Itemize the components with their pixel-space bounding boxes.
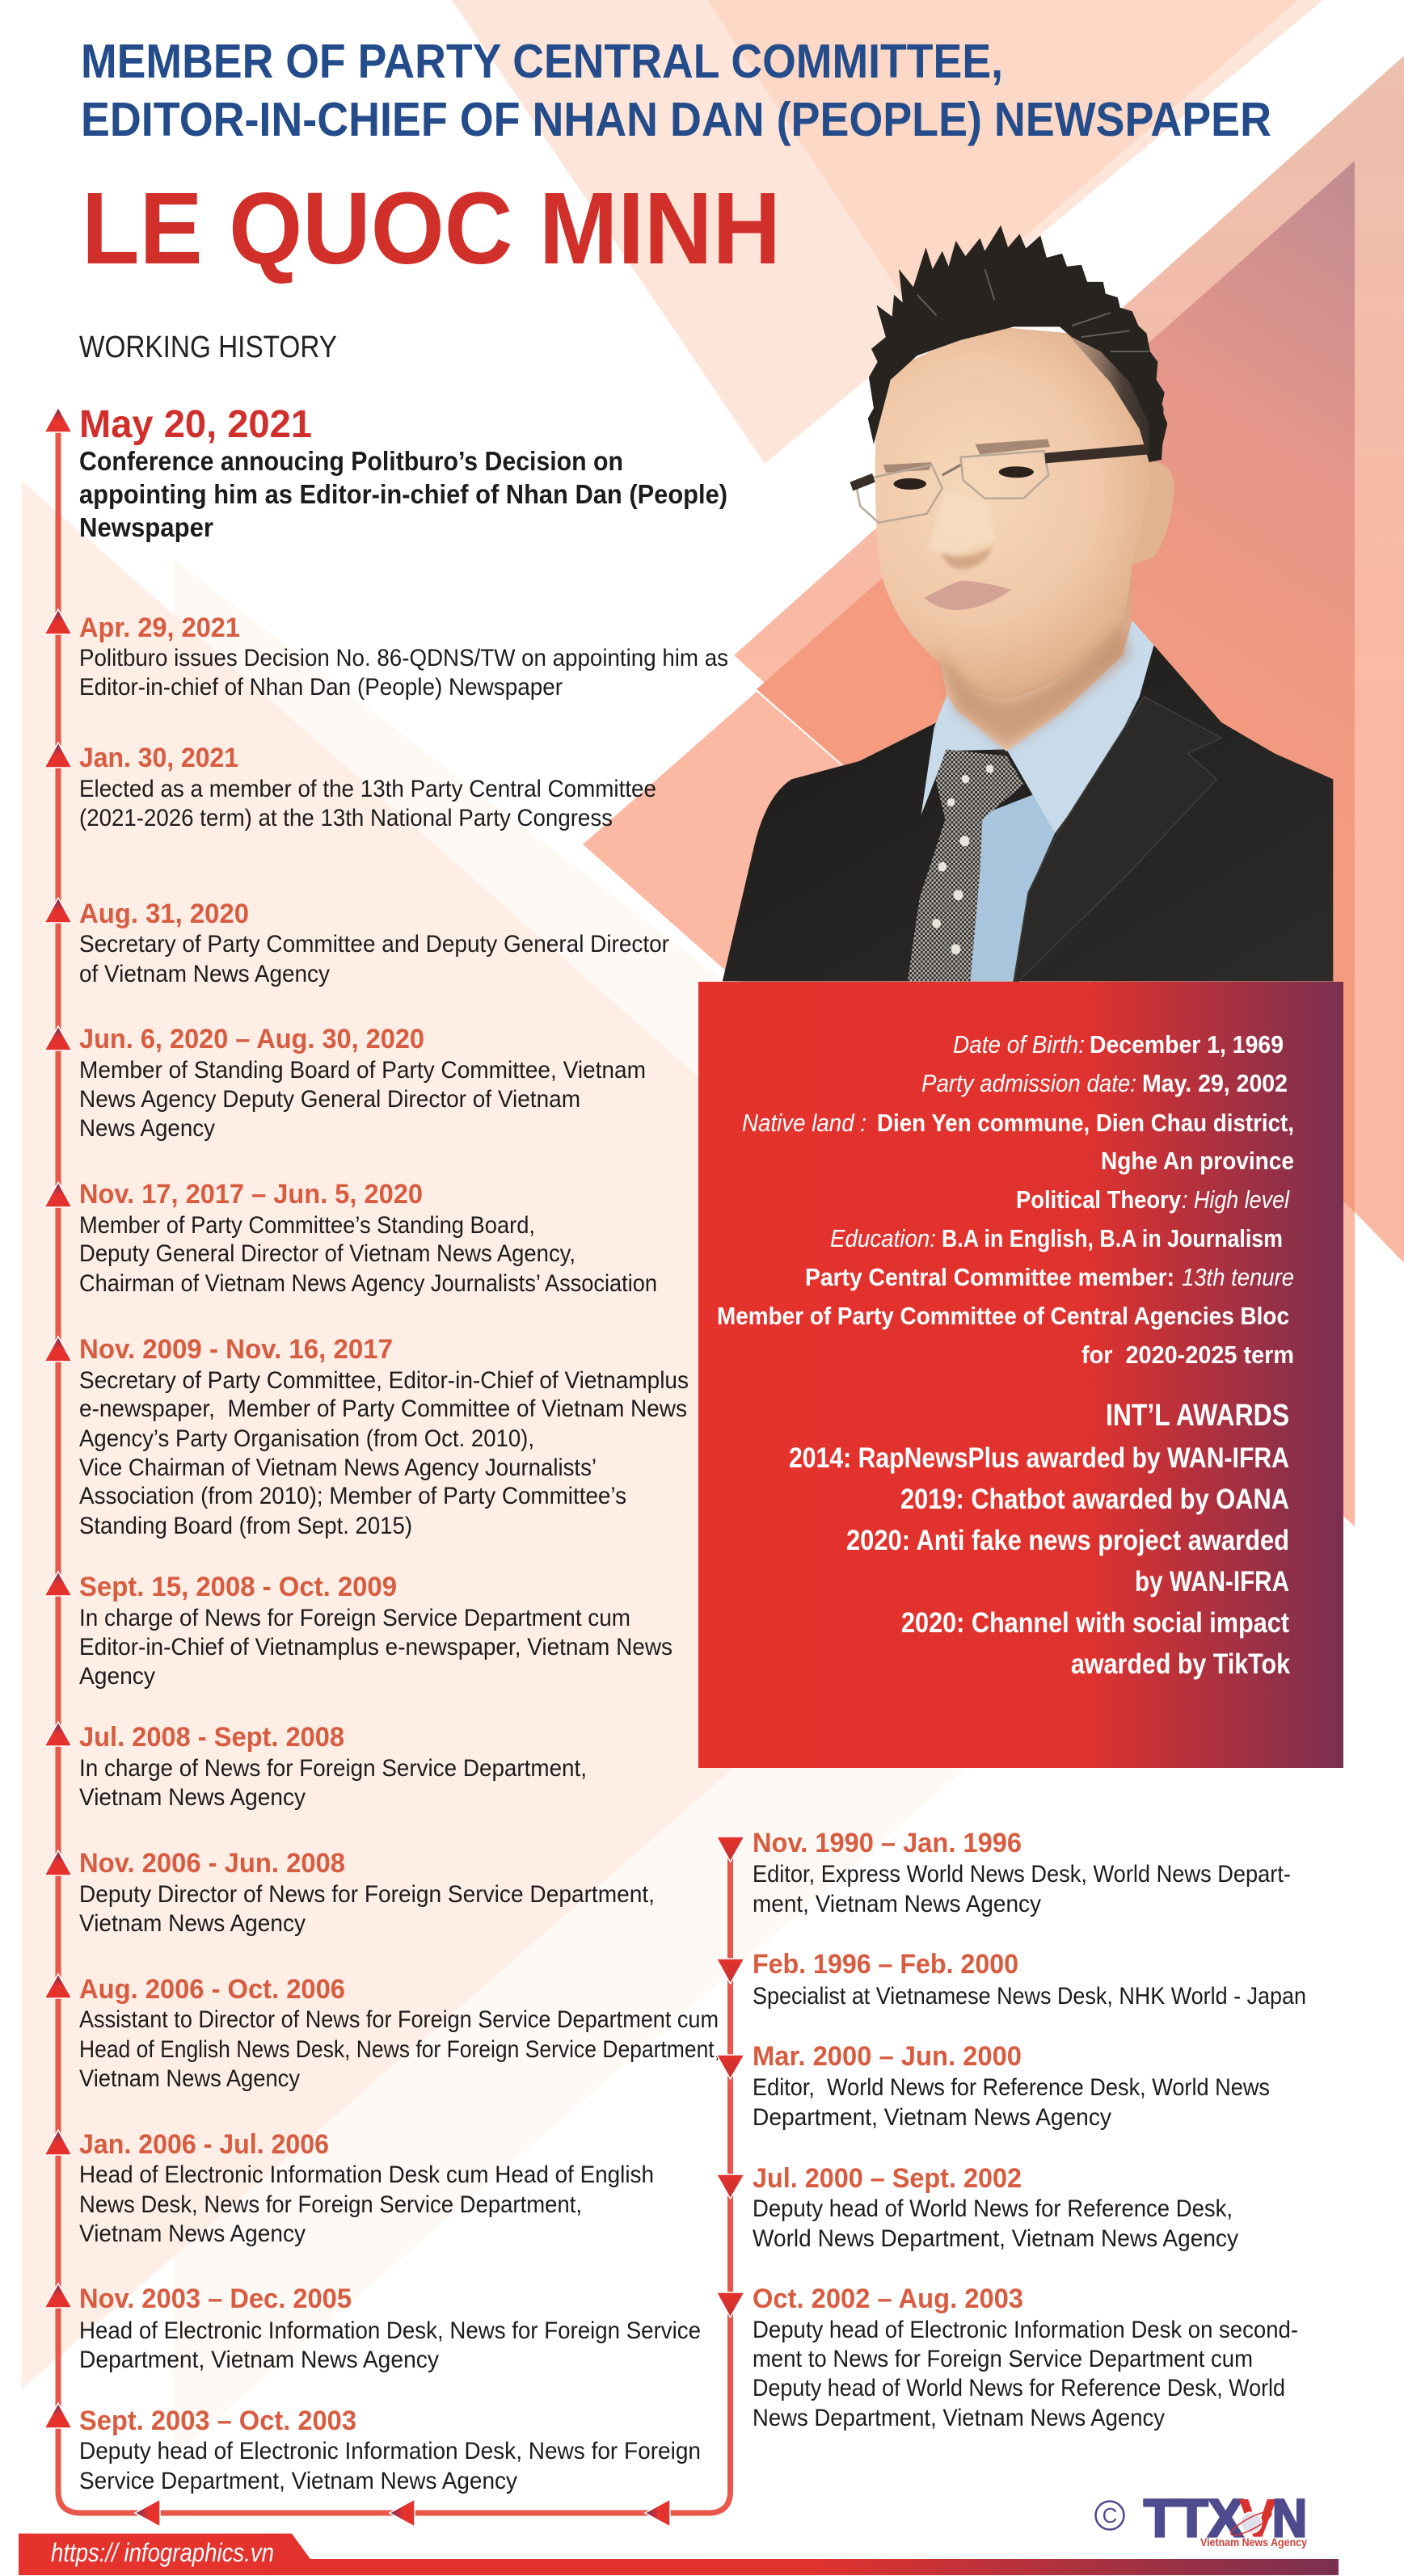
description	[753, 2074, 1270, 2131]
description: Association (from 2010); Member of Party Committee’s	[79, 1483, 626, 1509]
face	[875, 326, 1154, 698]
profile details: B.A in English, B.A in Journalism	[942, 1224, 1283, 1252]
awards list: 2019: Chatbot awarded by OANA	[900, 1484, 1289, 1515]
logo: TTXVN: V	[1239, 2488, 1276, 2548]
profile details: May. 29, 2002	[1142, 1069, 1288, 1097]
heading: international awards: INT’L AWARDS	[1106, 1399, 1289, 1433]
profile details: Party Central Committee member:	[805, 1263, 1174, 1291]
description: Vietnam News Agency	[79, 1910, 306, 1937]
description: Head of English News Desk, News for Foreign Service Department,	[79, 2036, 720, 2063]
description	[79, 1057, 646, 1142]
date: Mar. 2000 – Jun. 2000	[753, 2041, 1022, 2072]
hair highlights	[917, 269, 1149, 351]
description: Politburo issues Decision No. 86-QDNS/TW on appointing him as	[79, 645, 728, 671]
timeline entry: Aug. 2006	[44, 1974, 720, 2092]
profile details: Political Theory	[1016, 1185, 1182, 1214]
icons: left arrows on bottom connector	[135, 2499, 670, 2527]
icon: up arrow	[44, 1974, 72, 1998]
description	[79, 1212, 657, 1297]
timeline entry: Apr. 29, 2021	[44, 609, 728, 701]
description: Department, Vietnam News Agency	[753, 2104, 1111, 2131]
footer bar	[19, 2534, 1339, 2575]
panel: personal profile	[698, 982, 1343, 1768]
timeline entry: Nov. 1990	[716, 1828, 1291, 1917]
description: Deputy General Director of Vietnam News Agency,	[79, 1240, 576, 1267]
eyes	[893, 466, 1034, 490]
section heading: WORKING HISTORY	[79, 330, 337, 364]
timeline entry: Nov. 2003	[44, 2283, 701, 2373]
date: Nov. 2006 - Jun. 2008	[79, 1848, 345, 1879]
description	[753, 2195, 1238, 2252]
description: Vietnam News Agency	[79, 1784, 306, 1811]
profile details: Education:	[830, 1224, 936, 1252]
profile details: : High level	[1182, 1185, 1290, 1214]
description: Editor, World News for Reference Desk, World News	[753, 2074, 1270, 2101]
description: News Agency Deputy General Director of Vietnam	[79, 1086, 580, 1113]
description: Editor-in-chief of Nhan Dan (People) Newspaper	[79, 674, 563, 701]
logo tagline: Vietnam News Agency	[1200, 2536, 1307, 2549]
date: Sept. 15, 2008 - Oct. 2009	[79, 1572, 397, 1602]
date: Jul. 2008 - Sept. 2008	[79, 1722, 344, 1753]
icon: up arrow	[44, 1182, 72, 1207]
awards list: awarded by TikTok	[1071, 1648, 1290, 1680]
profile details: Native land :	[742, 1109, 866, 1137]
description: Department, Vietnam News Agency	[79, 2347, 439, 2373]
icon: up arrow	[44, 1572, 72, 1596]
shirt front	[970, 794, 1055, 981]
hair	[868, 225, 1167, 460]
description	[753, 2317, 1298, 2431]
timeline entry: May 20, 2021	[44, 403, 727, 542]
icon: up arrow	[44, 1336, 72, 1362]
date: May 20, 2021	[79, 403, 312, 446]
date: Jan. 30, 2021	[79, 743, 238, 773]
timeline entry: Mar. 2000	[716, 2041, 1270, 2131]
awards list	[789, 1442, 1290, 1680]
timeline entry: Oct. 2002	[716, 2283, 1298, 2431]
description	[79, 2006, 720, 2092]
timeline entry: Sept. 15, 2008	[44, 1572, 672, 1690]
description: Member of Party Committee’s Standing Board,	[79, 1212, 535, 1239]
title: EDITOR-IN-CHIEF OF NHAN DAN (PEOPLE) NEWSPAPER	[81, 93, 1271, 146]
date: Sept. 2003 – Oct. 2003	[79, 2406, 356, 2436]
description: Assistant to Director of News for Foreign Service Department cum	[79, 2006, 719, 2033]
mouth	[925, 581, 1011, 610]
description: Vietnam News Agency	[79, 2065, 300, 2092]
eyebrows	[883, 439, 1050, 473]
awards list: 2020: Anti fake news project awarded	[846, 1525, 1289, 1556]
profile details: Party admission date:	[921, 1069, 1136, 1097]
suit jacket	[723, 629, 1333, 981]
timeline connector line	[58, 428, 731, 2513]
icon: down arrow	[716, 1959, 744, 1984]
icon: down arrow	[716, 2055, 744, 2079]
title: MEMBER OF PARTY CENTRAL COMMITTEE,	[81, 35, 1003, 88]
icon: up arrow	[44, 743, 72, 768]
date: Nov. 17, 2017 – Jun. 5, 2020	[79, 1179, 423, 1210]
description: Vietnam News Agency	[79, 2220, 306, 2247]
icon: up arrow	[44, 1850, 72, 1875]
logo: TTXVN: TTX	[1144, 2488, 1243, 2548]
description	[79, 1605, 672, 1690]
description	[79, 931, 669, 987]
description: Deputy Director of News for Foreign Service Department,	[79, 1881, 655, 1908]
icon: up arrow	[44, 898, 72, 923]
description	[79, 645, 728, 701]
icon: up arrow	[44, 2283, 72, 2308]
description	[79, 1755, 587, 1811]
description: Deputy head of Electronic Information Desk, News for Foreign	[79, 2438, 701, 2464]
description: News Desk, News for Foreign Service Department,	[79, 2191, 582, 2218]
icon: down arrow	[716, 2292, 744, 2317]
description: Agency’s Party Organisation (from Oct. 2010),	[79, 1425, 534, 1452]
neck	[937, 562, 1132, 751]
icon: down arrow	[716, 1837, 744, 1862]
portrait photo illustration	[723, 225, 1333, 981]
icon: up arrow	[44, 609, 72, 634]
date: Nov. 1990 – Jan. 1996	[753, 1828, 1022, 1858]
footer url: https:// infographics.vn	[51, 2538, 274, 2567]
profile details: 13th tenure	[1182, 1263, 1294, 1291]
description	[79, 446, 727, 542]
profile details: Member of Party Committee of Central Agencies Bloc	[717, 1302, 1289, 1330]
description: Conference annoucing Politburo’s Decision on	[79, 446, 623, 476]
timeline entry: Jan. 30, 2021	[44, 743, 656, 831]
description: Vice Chairman of Vietnam News Agency Journalists’	[79, 1454, 597, 1481]
shirt collar	[921, 621, 1154, 833]
name heading: LE QUOC MINH	[82, 171, 781, 285]
description: In charge of News for Foreign Service Department cum	[79, 1605, 630, 1631]
description: Specialist at Vietnamese News Desk, NHK World - Japan	[753, 1983, 1306, 2010]
timeline entry: Nov. 2009	[44, 1334, 689, 1539]
description: Head of Electronic Information Desk, News for Foreign Service	[79, 2317, 701, 2344]
description	[79, 2438, 701, 2494]
profile details	[717, 1030, 1294, 1369]
description: ment to News for Foreign Service Department cum	[753, 2346, 1253, 2372]
ear	[1129, 462, 1174, 566]
date: Jun. 6, 2020 – Aug. 30, 2020	[79, 1024, 424, 1054]
description: Newspaper	[79, 512, 213, 542]
timeline entry: Sept. 2003	[44, 2403, 701, 2494]
lapel	[1014, 697, 1221, 981]
title	[81, 35, 1271, 146]
date: Aug. 31, 2020	[79, 899, 249, 929]
icon: up arrow	[44, 2130, 72, 2155]
timeline entry: Aug. 31, 2020	[44, 898, 669, 987]
timeline entry: Nov. 17, 2017	[44, 1179, 657, 1297]
description: Editor, Express World News Desk, World News Depart-	[753, 1861, 1291, 1888]
timeline entry: Jun. 6, 2020	[44, 1024, 646, 1142]
description	[79, 1881, 655, 1937]
description: Head of Electronic Information Desk cum Head of English	[79, 2161, 654, 2188]
description: Secretary of Party Committee and Deputy General Director	[79, 931, 669, 958]
logo: TTXVN: N	[1272, 2488, 1307, 2548]
description	[753, 1861, 1291, 1917]
description: (2021-2026 term) at the 13th National Party Congress	[79, 805, 613, 831]
date: Jul. 2000 – Sept. 2002	[753, 2163, 1022, 2194]
icon: up arrow	[44, 2403, 72, 2428]
timeline entry: Feb. 1996	[716, 1949, 1306, 2010]
date: Apr. 29, 2021	[79, 612, 240, 643]
awards list: 2014: RapNewsPlus awarded by WAN-IFRA	[789, 1442, 1289, 1474]
description: Service Department, Vietnam News Agency	[79, 2468, 517, 2494]
icon: up arrow	[44, 1026, 72, 1050]
timeline entry: Jan. 2006	[44, 2129, 654, 2247]
profile details: Nghe An province	[1101, 1147, 1294, 1175]
side hair	[1062, 326, 1164, 462]
date: Aug. 2006 - Oct. 2006	[79, 1974, 345, 2005]
description: e-newspaper, Member of Party Committee of Vietnam News	[79, 1395, 687, 1422]
date: Jan. 2006 - Jul. 2006	[79, 2129, 329, 2160]
icon: up arrow	[44, 1722, 72, 1746]
description	[79, 2161, 654, 2247]
description: appointing him as Editor-in-chief of Nhan Dan (People)	[79, 479, 727, 509]
description: Member of Standing Board of Party Committee, Vietnam	[79, 1057, 646, 1084]
description	[79, 776, 656, 831]
glasses	[851, 449, 1147, 523]
date: Nov. 2003 – Dec. 2005	[79, 2283, 352, 2314]
profile details: December 1, 1969	[1090, 1030, 1284, 1059]
description: In charge of News for Foreign Service Department,	[79, 1755, 587, 1782]
icon: copyright symbol: C	[1103, 2503, 1117, 2528]
profile details: Date of Birth:	[953, 1030, 1085, 1059]
awards list: by WAN-IFRA	[1135, 1566, 1289, 1597]
description: World News Department, Vietnam News Agency	[753, 2225, 1238, 2252]
icon: copyright symbol	[1096, 2502, 1124, 2529]
timeline entry: Jul. 2008	[44, 1722, 587, 1811]
description: Chairman of Vietnam News Agency Journalists’ Association	[79, 1270, 657, 1297]
tie	[908, 749, 1023, 981]
description: Standing Board (from Sept. 2015)	[79, 1513, 412, 1539]
timeline entry: Nov. 2006	[44, 1848, 655, 1937]
description: Elected as a member of the 13th Party Central Committee	[79, 776, 656, 802]
description: Editor-in-Chief of Vietnamplus e-newspaper, Vietnam News	[79, 1634, 672, 1661]
description: Deputy head of World News for Reference Desk,	[753, 2195, 1233, 2222]
description: News Department, Vietnam News Agency	[753, 2405, 1165, 2431]
globe	[1229, 2508, 1274, 2539]
description: of Vietnam News Agency	[79, 961, 330, 987]
logo: TTXVN	[1144, 2488, 1307, 2549]
description: Deputy head of Electronic Information Desk on second-	[753, 2317, 1298, 2343]
description: Secretary of Party Committee, Editor-in-Chief of Vietnamplus	[79, 1367, 689, 1394]
icon: up arrow	[44, 407, 72, 432]
description	[79, 1367, 689, 1539]
timeline entry: Jul. 2000	[716, 2163, 1238, 2252]
icon: down arrow	[716, 2174, 744, 2199]
profile details: Dien Yen commune, Dien Chau district,	[877, 1109, 1294, 1137]
description: News Agency	[79, 1115, 215, 1142]
date: Oct. 2002 – Aug. 2003	[753, 2283, 1023, 2314]
description	[79, 2317, 701, 2373]
date: Nov. 2009 - Nov. 16, 2017	[79, 1334, 393, 1365]
profile details: for 2020-2025 term	[1081, 1341, 1294, 1369]
description: Agency	[79, 1663, 155, 1690]
description: Deputy head of World News for Reference Desk, World	[753, 2375, 1285, 2401]
description: ment, Vietnam News Agency	[753, 1891, 1041, 1917]
face shading	[927, 490, 1130, 748]
date: Feb. 1996 – Feb. 2000	[753, 1949, 1018, 1980]
awards list: 2020: Channel with social impact	[901, 1607, 1289, 1639]
